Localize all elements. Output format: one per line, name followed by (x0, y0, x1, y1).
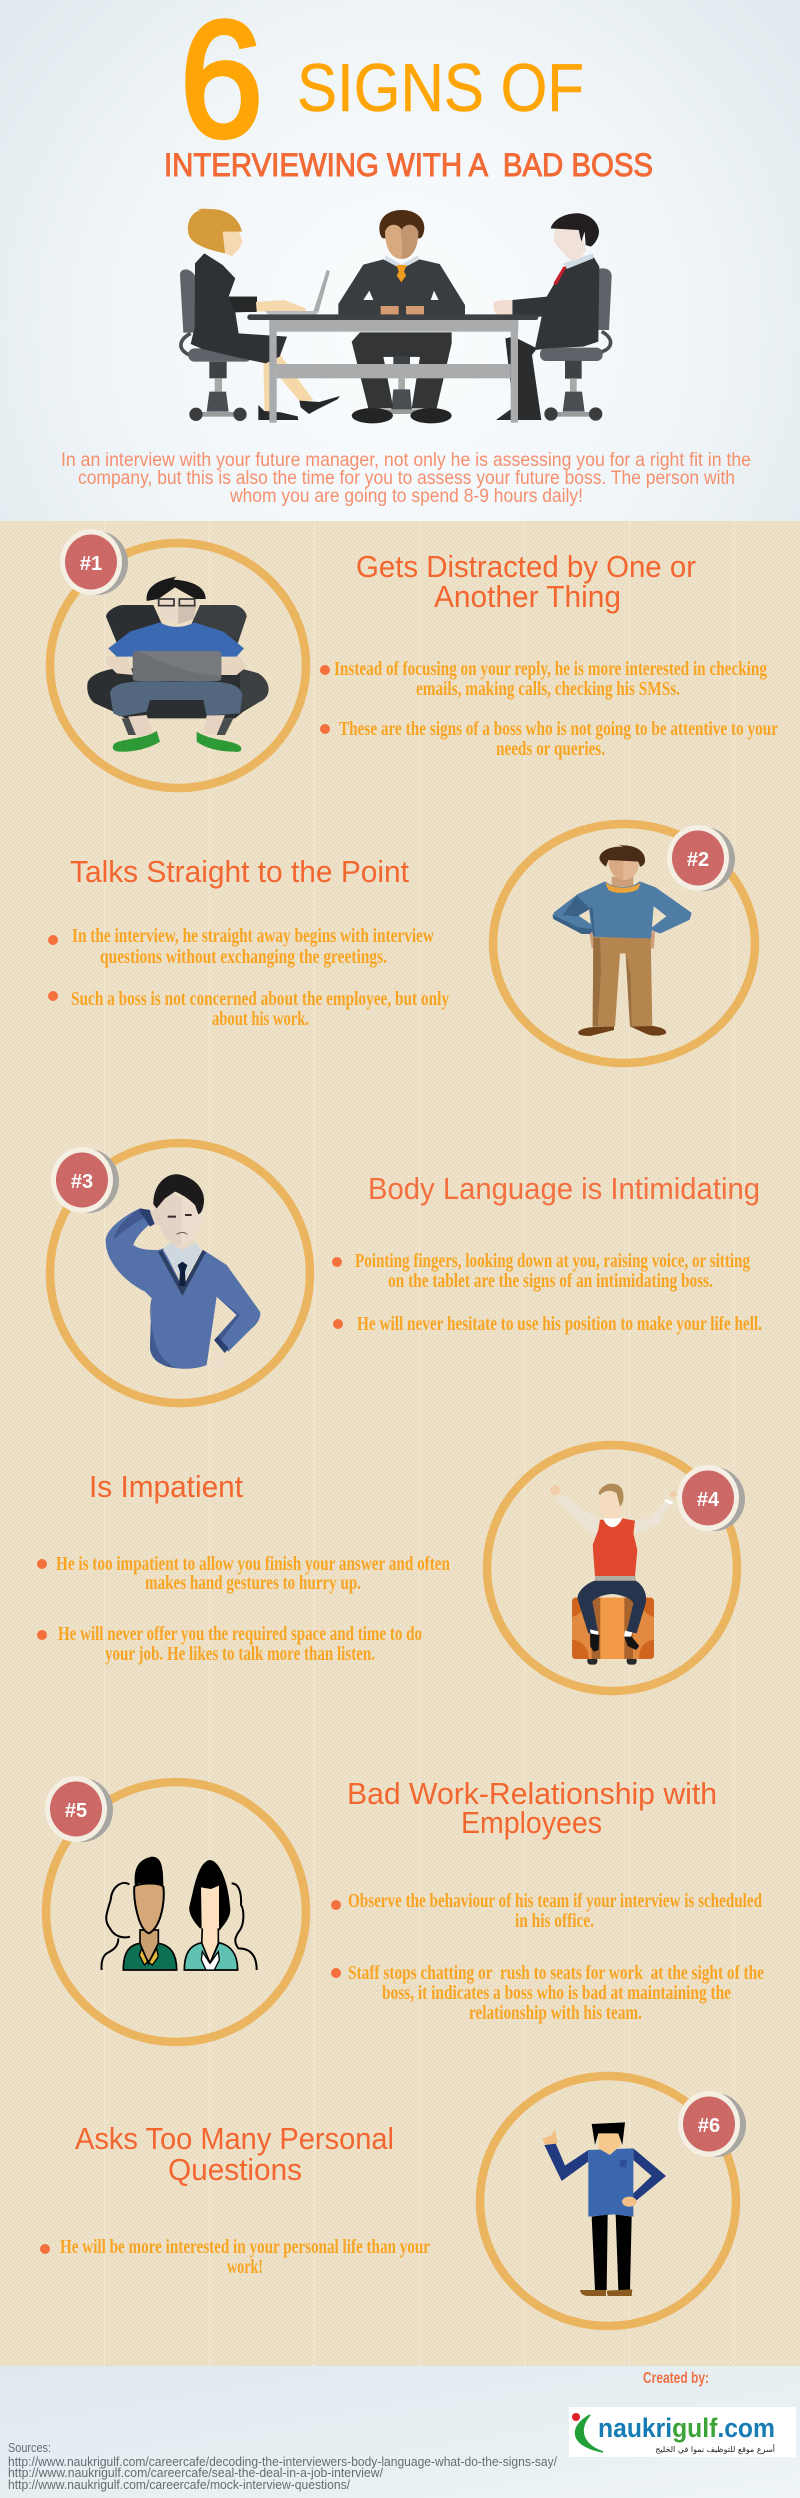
panel: sign 3 (50, 1143, 762, 1403)
bullet text 1: on the tablet are the signs of an intimidating boss. (388, 1270, 713, 1292)
badge: #5: #5 (65, 1800, 87, 1822)
panel: sign 2 (48, 824, 755, 1063)
bullet text 2: Such a boss is not concerned about the employee, but only (71, 988, 449, 1010)
heading: Body Language is Intimidating (368, 1171, 760, 1206)
badge: #6: #6 (698, 2115, 720, 2137)
heading (75, 2121, 394, 2187)
icon: man with laptop in armchair (87, 577, 269, 752)
badge: #3 (51, 1147, 119, 1213)
laptop (265, 270, 330, 314)
bullet text 2 (37, 1623, 422, 1665)
heading: Asks Too Many Personal (75, 2121, 394, 2156)
intro text (61, 450, 751, 507)
sources: http://www.naukrigulf.com/careercafe/seal-the-deal-in-a-job-interview/ (8, 2465, 383, 2480)
bullet text 2: He will never offer you the required space and time to do (58, 1623, 422, 1645)
bullet text 2: needs or queries. (496, 738, 605, 760)
ring (487, 1445, 737, 1691)
heading: Is Impatient (89, 1469, 243, 1504)
table (247, 314, 538, 423)
heading (347, 1776, 717, 1840)
intro text: In an interview with your future manager, not only he is assessing you for a right fit in the (61, 450, 751, 471)
bullet text 1: He is too impatient to allow you finish your answer and often (56, 1553, 450, 1575)
subtitle: INTERVIEWING WITH A BAD BOSS (164, 147, 653, 183)
right man on chair (493, 213, 612, 421)
bullet text 2: your job. He likes to talk more than listen. (105, 1643, 375, 1665)
heading: Talks Straight to the Point (70, 854, 409, 889)
sources: http://www.naukrigulf.com/careercafe/mock-interview-questions/ (8, 2477, 350, 2492)
woman on chair (180, 209, 340, 421)
sources: http://www.naukrigulf.com/careercafe/decoding-the-interviewers-body-language-what-do-the-signs-say/ (8, 2454, 557, 2469)
bullet text 1: in his office. (515, 1910, 594, 1932)
heading: Questions (168, 2152, 302, 2187)
badge: #1 (60, 529, 128, 595)
logo: naukrigulf (569, 2407, 796, 2457)
heading: Employees (461, 1805, 602, 1840)
credit: created by: Created by: (643, 2370, 709, 2387)
bullet text 1: In the interview, he straight away begins with interview (72, 925, 434, 947)
bullet text 1 (332, 1250, 750, 1292)
icon: man in blue sweater, hand to head (106, 1174, 260, 1370)
bullet text 1: makes hand gestures to hurry up. (145, 1572, 361, 1594)
bullet text (40, 2236, 430, 2278)
ring (50, 1143, 310, 1403)
logo: naukrigulf: أسرع موقع للتوظيف نموا في الخليج (655, 2444, 775, 2454)
ring (46, 1782, 306, 2042)
badge: #1: #1 (80, 553, 102, 575)
sources (8, 2440, 557, 2492)
bullet text 2 (48, 988, 449, 1030)
ring (480, 2076, 736, 2326)
badge: #4 (677, 1465, 745, 1531)
badge: #2 (667, 825, 735, 891)
bullet text 1 (331, 1890, 762, 1932)
intro text: company, but this is also the time for you to assess your future boss. The person with (78, 468, 735, 489)
bullet text 1: questions without exchanging the greetings. (100, 946, 387, 968)
bullet text: He will be more interested in your personal life than your (60, 2236, 430, 2258)
bullet text 1 (37, 1553, 450, 1594)
intro text: whom you are going to spend 8-9 hours daily! (229, 486, 583, 507)
heading: Another Thing (434, 579, 621, 614)
icon: team of employees (102, 1857, 257, 1970)
badge: #3: #3 (71, 1171, 93, 1193)
panel: header background (0, 0, 800, 521)
badge: #6 (678, 2091, 746, 2157)
logo: naukrigulf: naukrigulf.com (598, 2413, 775, 2443)
sources: Sources: (8, 2440, 51, 2455)
bullet text 1: emails, making calls, checking his SMSs. (416, 678, 680, 700)
panel: footer background (0, 2366, 800, 2498)
ring (493, 824, 755, 1063)
panel: beige content background (0, 521, 800, 2366)
title: signs of: SIGNS OF (297, 50, 584, 126)
panel: sign 6 (40, 2076, 746, 2326)
badge: #4: #4 (697, 1489, 720, 1511)
icon: man with thumb up (542, 2122, 666, 2296)
centre man (338, 210, 465, 423)
panel: sign 4 (37, 1445, 745, 1691)
badge: #5 (45, 1776, 113, 1842)
panel: sign 5 (45, 1776, 764, 2042)
bullet text 2 (320, 718, 778, 760)
panel: sign 1 (50, 529, 778, 788)
bullet text 2 (331, 1962, 764, 2024)
illustration: interview table scene (180, 209, 612, 423)
heading: Gets Distracted by One or (356, 549, 696, 584)
bullet text 1 (48, 925, 434, 968)
bullet text: work! (227, 2256, 263, 2278)
icon: standing man, hands on hips (552, 845, 690, 1036)
heading (356, 549, 696, 614)
heading: Bad Work-Relationship with (347, 1776, 717, 1811)
bullet text 2: relationship with his team. (469, 2002, 642, 2024)
bullet text 2: about his work. (212, 1008, 309, 1030)
badge: #2: #2 (687, 849, 709, 871)
bullet text 1 (320, 658, 767, 700)
icon: man with raised arms on suitcase (550, 1484, 677, 1665)
ring (50, 543, 306, 788)
